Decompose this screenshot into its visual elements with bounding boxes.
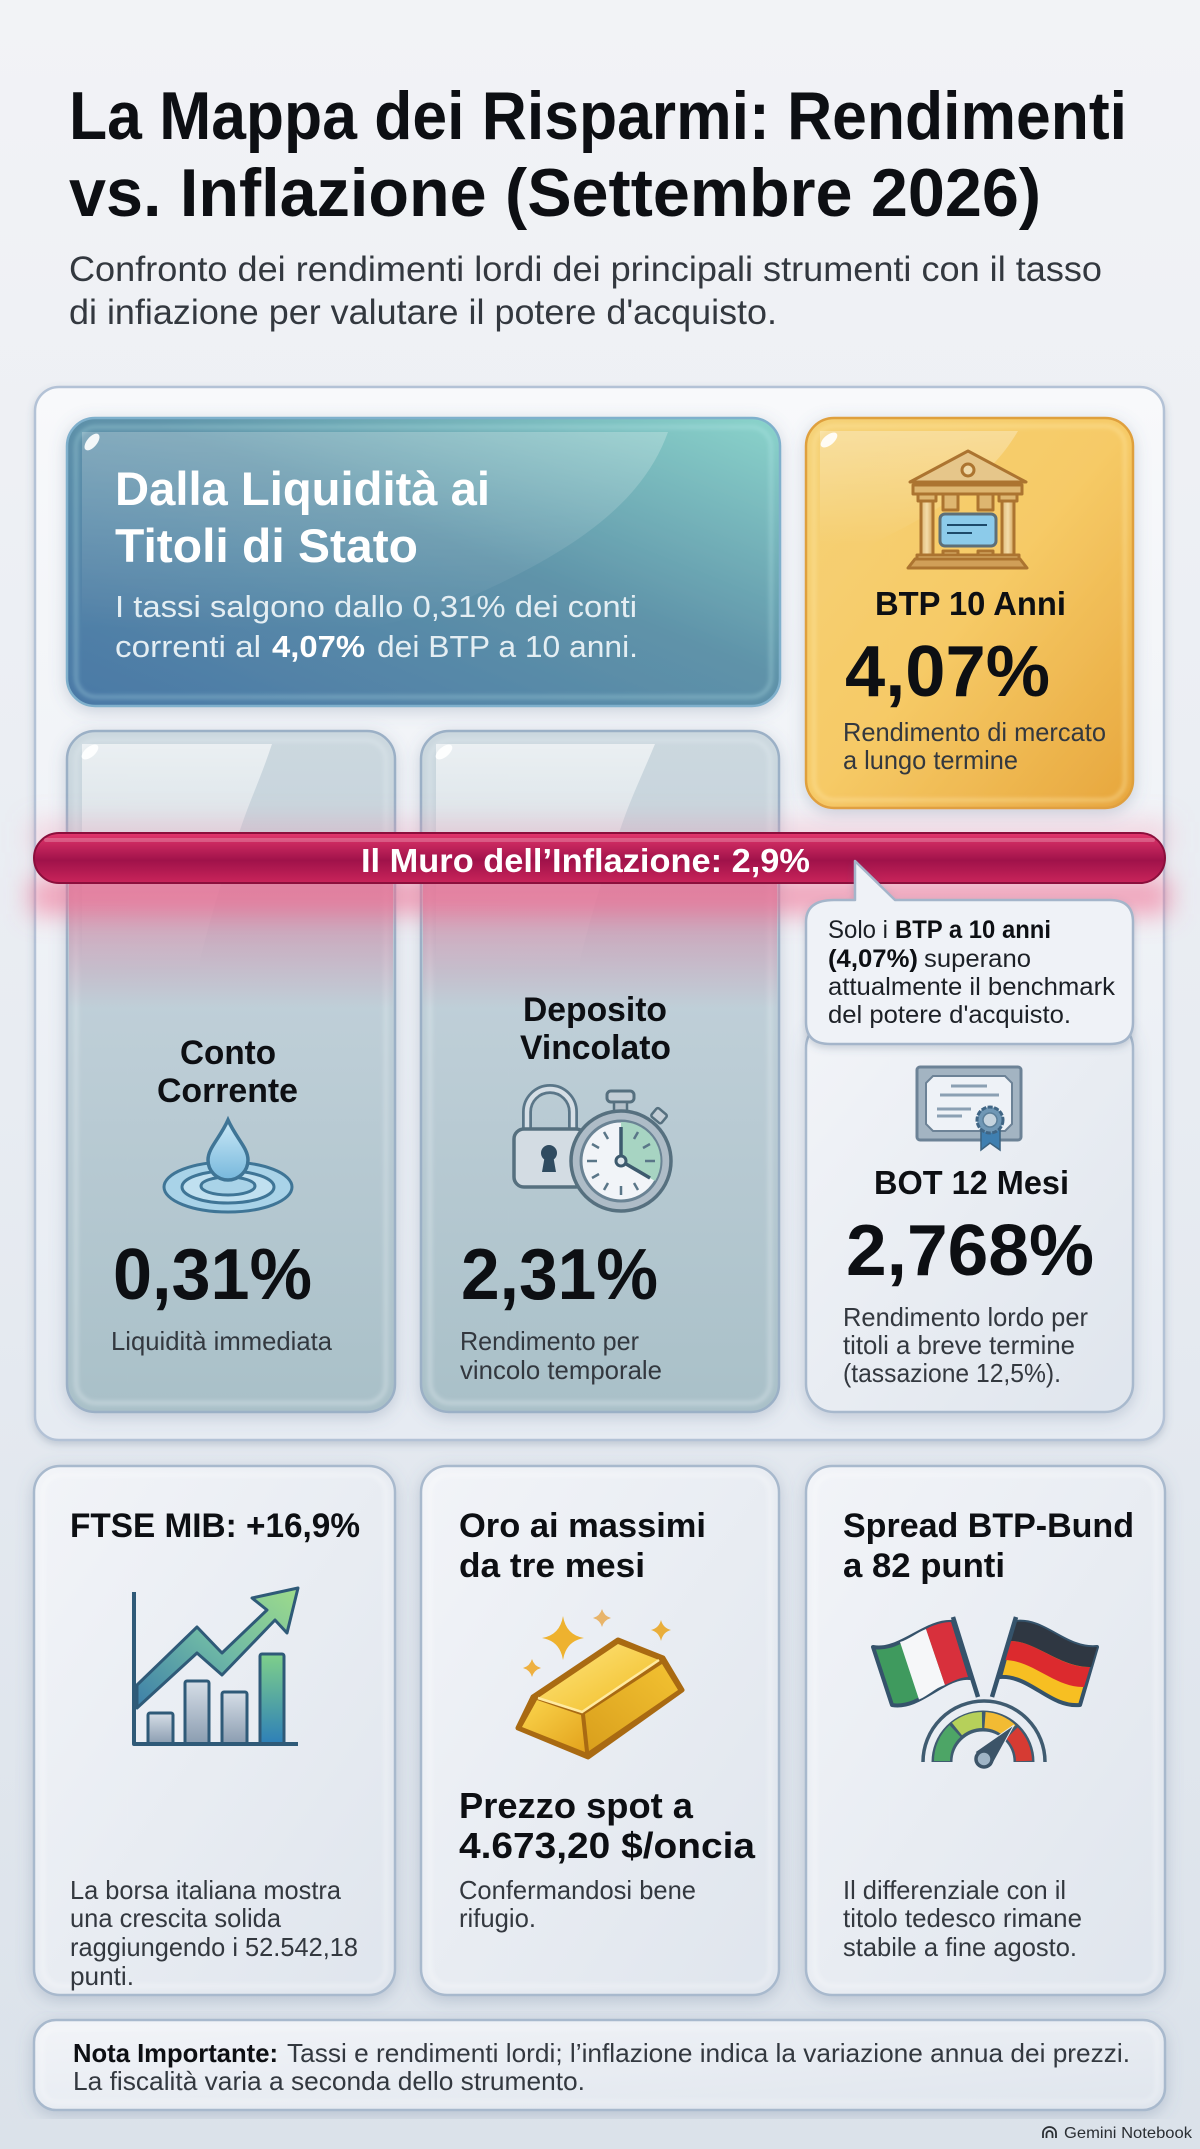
note text: La fiscalità varia a seconda dello strumento. [73,2066,585,2096]
oro description: rifugio. [459,1903,536,1933]
spread description [843,1875,1082,1962]
callout text: (4,07%) [828,945,918,973]
oro heading: Oro ai massimi [459,1507,706,1545]
panel: FTSE MIB [34,1466,395,1995]
main panel [35,387,1164,1440]
card heading: Titoli di Stato [115,519,418,572]
callout text [828,916,1116,1029]
panel: spread [806,1466,1165,1995]
BOT description: (tassazione 12,5%). [843,1358,1061,1388]
spread heading [843,1507,1134,1585]
BOT value: 2,768% [846,1211,1094,1291]
spread description: titolo tedesco rimane [843,1903,1082,1933]
BOT label: BOT 12 Mesi [874,1164,1069,1201]
title: La Mappa dei Risparmi: Rendimenti [69,78,1127,154]
oro heading: da tre mesi [459,1547,645,1585]
icon: certificate [917,1067,1021,1150]
deposito value: 2,31% [461,1235,658,1315]
deposito vincolato heading [520,991,671,1067]
callout text: attualmente il benchmark [828,973,1116,1001]
panel: deposito vincolato background [421,731,779,1412]
BTP description: Rendimento di mercato [843,717,1106,747]
deposito vincolato heading: Deposito [523,991,667,1029]
note text [73,2038,1130,2096]
conto corrente heading: Conto [180,1034,276,1072]
card body text [115,589,638,664]
note text: Nota Importante: [73,2038,278,2068]
title: vs. Inflazione (Settembre 2026) [69,155,1041,231]
panel: BOT 12 mesi background [806,1020,1133,1412]
spread description: stabile a fine agosto. [843,1932,1077,1962]
oro price: 4.673,20 $/oncia [459,1825,756,1866]
oro description [459,1875,696,1933]
oro price [459,1785,756,1866]
card body text: I tassi salgono dallo 0,31% dei conti [115,589,637,624]
icon: flags and gauge [873,1617,1097,1767]
callout text: BTP a 10 anni [895,916,1051,944]
FTSE description: raggiungendo i 52.542,18 [70,1932,358,1962]
spread description: Il differenziale con il [843,1875,1066,1905]
callout text: superano [924,945,1031,973]
subtitle: di infiazione per valutare il potere d'acquisto. [69,293,777,332]
conto corrente value: 0,31% [113,1235,312,1315]
panel: conto corrente background [67,731,395,1412]
deposito description [460,1326,662,1385]
inflation label: Il Muro dell’Inflazione: 2,9% [361,842,810,879]
card body text: 4,07% [272,629,365,664]
icon: padlock and stopwatch [514,1089,671,1211]
FTSE description: punti. [70,1961,134,1991]
BTP label: BTP 10 Anni [875,585,1066,622]
card body text: dei BTP a 10 anni. [377,629,638,664]
subtitle [69,250,1102,332]
BOT description: Rendimento lordo per [843,1302,1088,1332]
BOT description [843,1302,1088,1388]
oro description: Confermandosi bene [459,1875,696,1905]
BOT description: titoli a breve termine [843,1330,1075,1360]
BTP description [843,717,1106,775]
FTSE heading: FTSE MIB: +16,9% [70,1507,360,1545]
callout [806,861,1133,1044]
oro price: Prezzo spot a [459,1785,694,1826]
FTSE description: una crescita solida [70,1903,282,1933]
spread heading: a 82 punti [843,1547,1005,1585]
icon: rising chart [134,1588,298,1744]
conto corrente heading [157,1034,298,1110]
gemini notebook credit: Gemini Notebook [1064,2125,1193,2142]
deposito description: vincolo temporale [460,1355,662,1385]
callout text: Solo i [828,916,888,944]
callout text: del potere d'acquisto. [828,1001,1071,1029]
inflation wall bar [34,833,1165,883]
FTSE description: La borsa italiana mostra [70,1875,342,1905]
subtitle: Confronto dei rendimenti lordi dei principali strumenti con il tasso [69,250,1102,289]
conto corrente heading: Corrente [157,1072,298,1110]
icon: bank building [908,451,1027,568]
card body text: correnti al [115,629,261,664]
card heading: Dalla Liquidità ai [115,462,490,515]
BTP description: a lungo termine [843,745,1018,775]
FTSE description [70,1875,358,1991]
title [69,78,1127,231]
panel: oro [421,1466,779,1995]
icon: water drop [164,1120,292,1212]
panel: blue headline card [67,418,780,706]
spread heading: Spread BTP-Bund [843,1507,1134,1545]
oro heading [459,1507,706,1585]
deposito vincolato heading: Vincolato [520,1029,671,1067]
panel: important note [34,2020,1165,2110]
deposito description: Rendimento per [460,1326,639,1356]
inflation wall glow [30,822,1170,914]
panel: BTP 10 Anni [806,418,1133,808]
icon: gold bar [518,1609,682,1757]
note text: Tassi e rendimenti lordi; l’inflazione indica la variazione annua dei prezzi. [287,2038,1130,2068]
BTP value: 4,07% [845,632,1050,712]
card heading [115,462,490,572]
conto corrente description: Liquidità immediata [111,1326,333,1356]
